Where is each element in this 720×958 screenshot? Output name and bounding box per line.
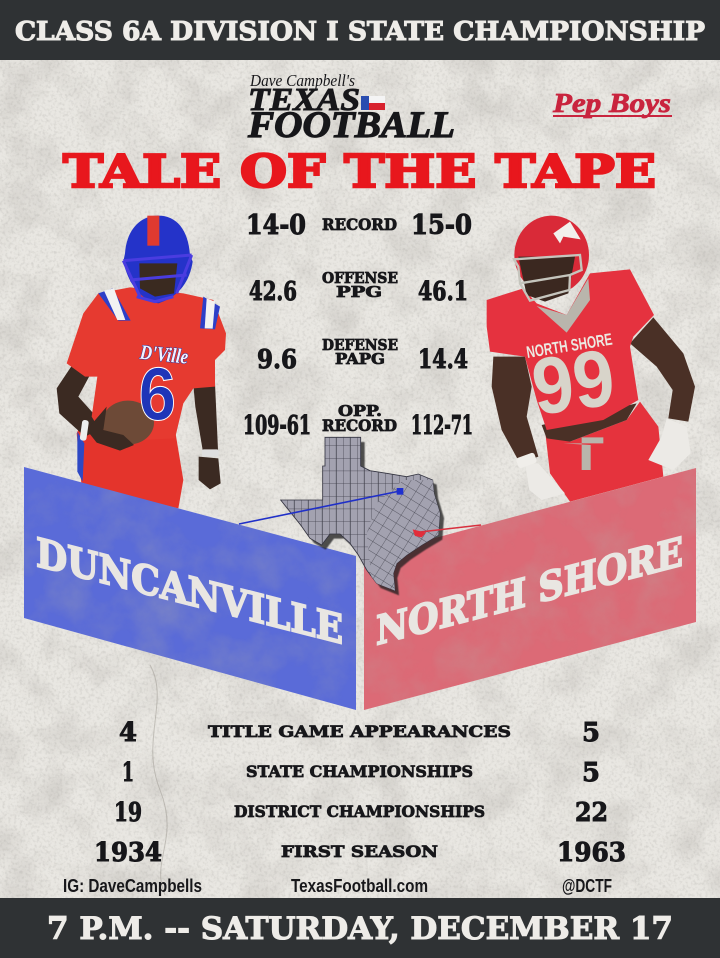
player: Duncanville quarterback: 6: [139, 352, 176, 436]
game time text: 7 P.M. -- SATURDAY, DECEMBER 17: [47, 911, 673, 947]
map of Texas with team locations: [239, 437, 481, 597]
title: TALE OF THE TAPE: [63, 145, 656, 198]
stats: record row: 14-0: [246, 210, 306, 241]
stats: defense row: DEFENSE: [322, 336, 398, 354]
panel: Duncanville: [24, 467, 356, 710]
stats: opponent record row: 109-61: [243, 411, 311, 441]
stats: offense row: 46.1: [418, 277, 468, 307]
stats: record row: [246, 210, 472, 241]
player: Duncanville quarterback: [57, 216, 226, 508]
logo: Pep Boys: Pep Boys: [552, 88, 671, 118]
header bar: [0, 0, 720, 60]
stats: district championships: 19: [114, 798, 142, 828]
player: Duncanville quarterback: D'Ville: [138, 342, 189, 369]
stats: district championships: DISTRICT CHAMPIONSHIPS: [234, 802, 485, 821]
stats: first season: [94, 838, 626, 868]
logo: Texas Football: [247, 71, 455, 146]
stats: offense row: OFFENSE: [322, 269, 398, 287]
stats: opponent record row: 112-71: [411, 411, 473, 441]
logo: Texas Football: TEXAS: [248, 81, 360, 117]
stats: district championships: 22: [575, 798, 608, 828]
stats: district championships: [114, 798, 608, 828]
stats: record row: RECORD: [322, 215, 397, 234]
stats: title game appearances: TITLE GAME APPEARANCES: [208, 722, 511, 741]
stats: state championships: 5: [582, 758, 600, 788]
player: North Shore defender: 99: [527, 332, 620, 432]
stats: defense row: 9.6: [257, 345, 297, 375]
social handles: [63, 876, 612, 896]
stats: offense row: PPG: [336, 283, 382, 301]
stats: opponent record row: [243, 402, 473, 441]
stats: defense row: PAPG: [335, 350, 385, 368]
stats: defense row: 14.4: [418, 345, 468, 375]
player: North Shore defender: NORTH SHORE: [525, 330, 614, 362]
stats: offense row: 42.6: [249, 277, 297, 307]
stats: defense row: [257, 336, 468, 375]
logo: Texas Football: Dave Campbell's: [249, 71, 355, 90]
header text: CLASS 6A DIVISION I STATE CHAMPIONSHIP: [15, 17, 705, 47]
stats: opponent record row: RECORD: [322, 416, 397, 435]
panel: North Shore: NORTH SHORE: [376, 528, 683, 655]
stats: first season: 1963: [557, 838, 626, 868]
stats: first season: FIRST SEASON: [281, 842, 438, 861]
stats: title game appearances: 4: [119, 718, 137, 748]
panel: Duncanville: DUNCANVILLE: [36, 529, 343, 654]
panel: North Shore: [364, 468, 696, 710]
stats: opponent record row: OPP.: [338, 402, 382, 420]
logo: Texas Football: FOOTBALL: [247, 105, 455, 146]
stats: state championships: STATE CHAMPIONSHIPS: [246, 762, 473, 781]
stats: record row: 15-0: [411, 210, 472, 241]
social handles: @DCTF: [562, 876, 612, 896]
stats: title game appearances: 5: [582, 718, 600, 748]
footer bar: [0, 898, 720, 958]
stats: offense row: [249, 269, 468, 307]
social handles: IG: DaveCampbells: [63, 876, 202, 896]
stats: state championships: [122, 758, 600, 788]
stats: first season: 1934: [94, 838, 162, 868]
social handles: TexasFootball.com: [291, 876, 428, 896]
player: North Shore defender: [487, 216, 695, 502]
stats: state championships: 1: [122, 758, 134, 788]
stats: title game appearances: [119, 718, 600, 748]
